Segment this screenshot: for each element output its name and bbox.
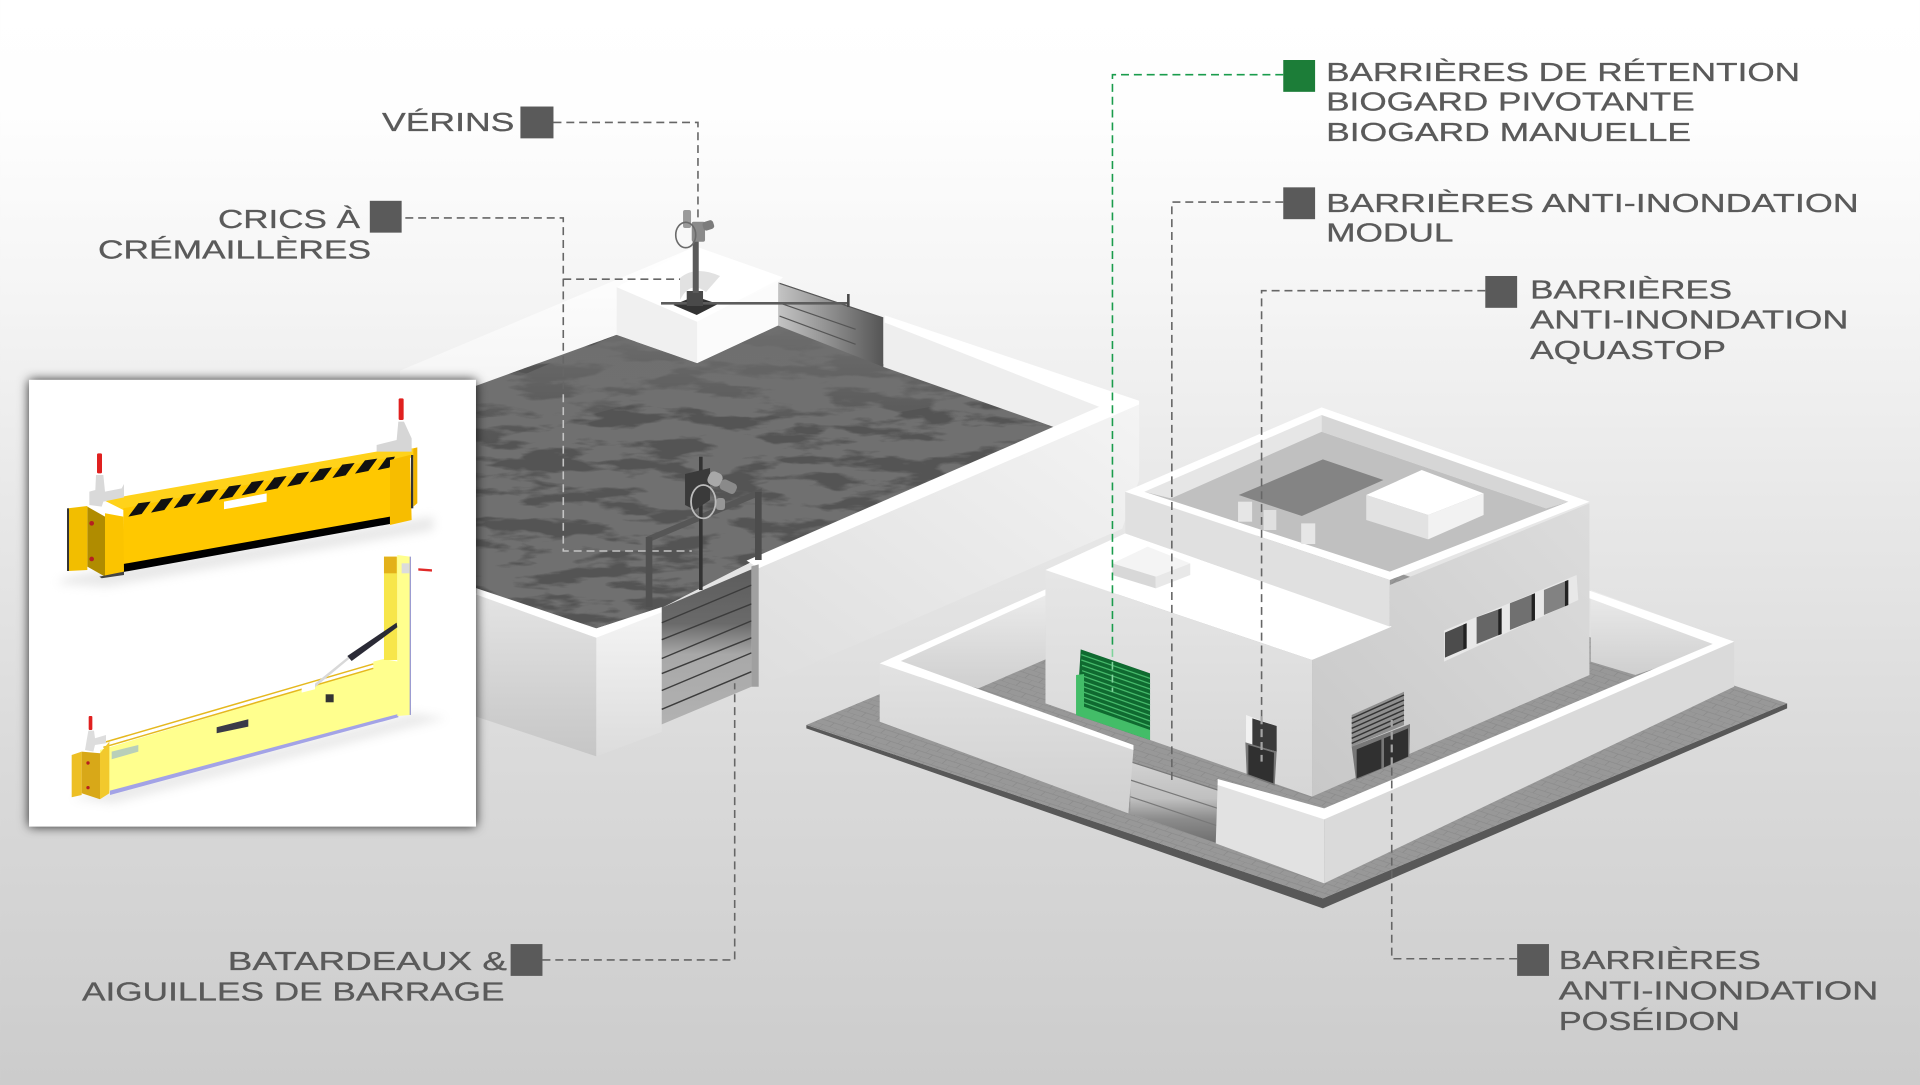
rising-stem actuator on the pier <box>661 210 850 315</box>
callout: barrières anti-inondation Poséidon: POSÉIDON <box>1559 1006 1740 1036</box>
building left face <box>1045 570 1312 797</box>
callout: barrières anti-inondation Poséidon: BARRIÈRES <box>1559 945 1761 975</box>
Modul gate in the wall gap <box>1130 762 1218 843</box>
product photo card <box>29 380 476 827</box>
compound back-left wall <box>880 590 1045 688</box>
connector: Aquastop over door <box>1261 716 1263 762</box>
connector: Poséidon <box>1392 765 1517 959</box>
connector: Biogard over door <box>1111 649 1113 692</box>
ribbon windows <box>1444 575 1578 662</box>
roof equipment block <box>1366 470 1484 539</box>
front-right wall face <box>759 405 1139 687</box>
building right face <box>1312 503 1589 797</box>
callout: barrières de rétention Biogard <box>1283 57 1800 147</box>
roof vent box <box>1112 547 1190 588</box>
callout: crics à crémaillères <box>98 201 402 264</box>
central pier right face <box>697 282 778 363</box>
callout: barrières anti-inondation Aquastop <box>1485 274 1848 365</box>
callout: vérins: VÉRINS <box>382 107 514 137</box>
rear sluice gate panel <box>778 282 883 367</box>
front-right wall rim <box>747 401 1139 568</box>
callout: barrières anti-inondation Poséidon <box>1517 944 1878 1036</box>
courtyard paving <box>979 600 1635 808</box>
central pier top <box>617 246 783 322</box>
back-right inner wall <box>883 320 1103 427</box>
paved ground plate <box>806 530 1787 898</box>
connector: vérins <box>553 122 698 233</box>
water surface <box>352 325 1054 628</box>
callout: batardeaux et aiguilles de barrage: BATARDEAUX & <box>228 946 508 976</box>
compound back-right wall <box>1591 590 1734 675</box>
yellow manual barrier <box>57 398 433 587</box>
front-left wall left face <box>352 548 596 756</box>
callout: barrières anti-inondation Aquastop: BARRIÈRES <box>1530 274 1732 304</box>
upper roof inner walls <box>1144 415 1322 498</box>
callout: barrières de rétention Biogard: BIOGARD MANUELLE <box>1326 117 1691 147</box>
connector: Poséidon over door <box>1391 720 1393 765</box>
callout: barrières anti-inondation Modul: BARRIÈRES ANTI-INONDATION <box>1326 188 1859 218</box>
roof pipes <box>1238 502 1315 544</box>
front-left wall rim <box>476 588 662 638</box>
connector: batardeaux <box>542 683 735 960</box>
building compound illustration <box>806 407 1787 908</box>
connector: crics over water <box>563 394 692 551</box>
connector: Biogard <box>1112 75 1283 649</box>
callout: vérins <box>382 107 553 138</box>
connector lines <box>405 75 1517 960</box>
callout: barrières de rétention Biogard: BIOGARD PIVOTANTE <box>1326 87 1695 117</box>
callout: batardeaux et aiguilles de barrage: AIGUILLES DE BARRAGE <box>82 976 504 1006</box>
upper roof floor <box>1144 432 1568 572</box>
gear operator over the gate <box>646 457 762 607</box>
solar panel <box>1239 459 1383 516</box>
Aquastop door barrier <box>1245 715 1277 786</box>
equipment: actuators <box>646 210 850 607</box>
calm water near the pier <box>476 325 977 446</box>
basin back walls and central pier top <box>400 246 783 431</box>
callout: barrières de rétention Biogard: BARRIÈRES DE RÉTENTION <box>1326 57 1800 87</box>
compound front walls <box>880 642 1734 883</box>
upper storey left face <box>1125 492 1390 627</box>
callout: barrières anti-inondation Poséidon: ANTI-INONDATION <box>1559 976 1878 1006</box>
callout: crics à crémaillères: CRÉMAILLÈRES <box>98 234 371 264</box>
callout: barrières anti-inondation Modul <box>1283 187 1859 248</box>
lower roof <box>1045 533 1392 660</box>
front-left wall right face <box>596 611 662 756</box>
connector: Aquastop <box>1262 291 1485 716</box>
green Biogard retention barrier <box>1076 649 1150 740</box>
ground-level door barriers <box>1076 649 1410 786</box>
paved ground plate edge <box>806 703 1787 908</box>
upper roof rim <box>1125 407 1589 580</box>
pale yellow pivoting barrier <box>72 555 447 803</box>
connector: crics à crémaillères <box>405 218 696 394</box>
callout: crics à crémaillères: CRICS À <box>218 204 361 234</box>
batardeau gate <box>662 564 759 724</box>
back-right wall rim <box>885 315 1139 408</box>
central pier left face <box>617 287 697 363</box>
callout: batardeaux et aiguilles de barrage <box>82 944 542 1006</box>
water basin illustration <box>352 246 1139 756</box>
callout: barrières anti-inondation Modul: MODUL <box>1326 218 1453 248</box>
callout: barrières anti-inondation Aquastop: AQUASTOP <box>1530 335 1726 365</box>
callout: barrières anti-inondation Aquastop: ANTI-INONDATION <box>1530 304 1848 334</box>
connector: Modul <box>1172 202 1283 785</box>
Poséidon double door barrier <box>1352 692 1410 780</box>
